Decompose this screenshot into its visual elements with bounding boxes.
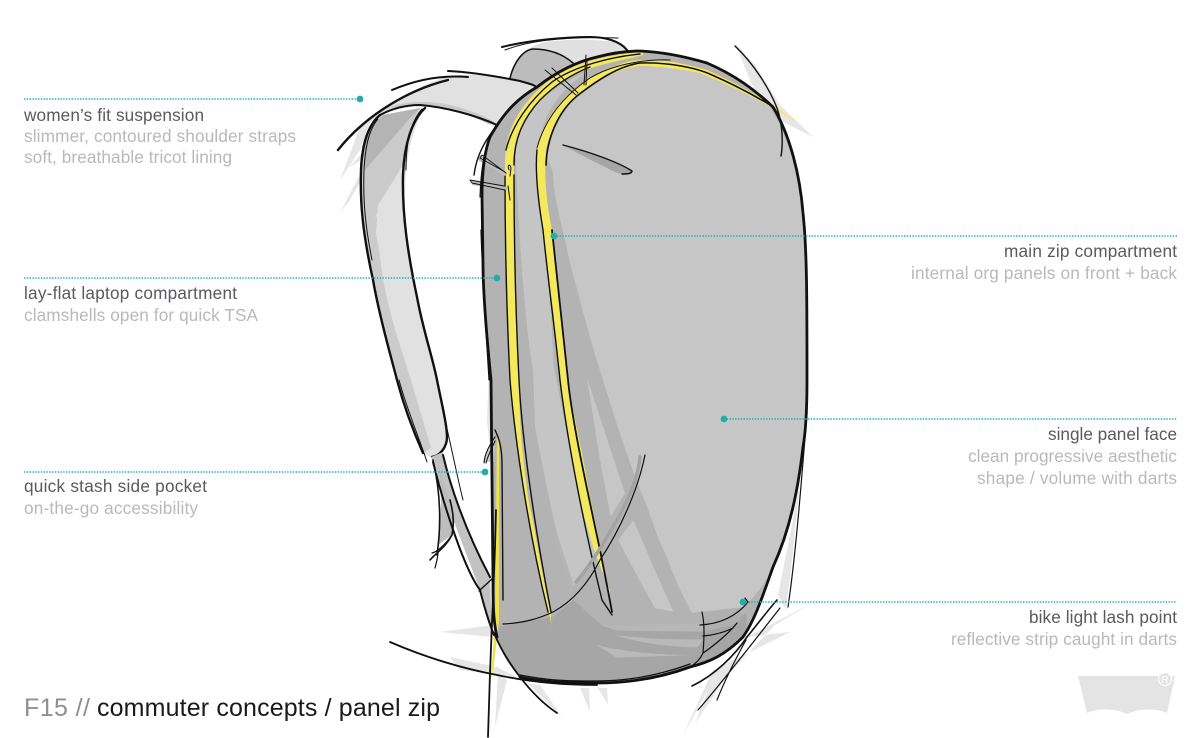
bottom dark zone bbox=[498, 600, 746, 680]
callout: main zip compartment bbox=[551, 233, 1177, 283]
callout: main zip compartment: internal org panels on front + back bbox=[911, 263, 1177, 283]
callout: single panel face bbox=[721, 416, 1177, 488]
callout: single panel face: shape / volume with darts bbox=[977, 468, 1177, 488]
callout: women's fit suspension bbox=[23, 96, 363, 167]
callout: lay-flat laptop compartment: clamshells open for quick TSA bbox=[24, 305, 259, 325]
zipper 1 bbox=[505, 52, 643, 630]
light stripe below seam bbox=[618, 520, 673, 612]
strap underside wash bbox=[385, 102, 497, 124]
zipper pulls bbox=[470, 55, 587, 200]
callout: lay-flat laptop compartment: lay-flat laptop compartment bbox=[24, 283, 237, 303]
callout: lay-flat laptop compartment bbox=[24, 275, 500, 325]
logo bbox=[1078, 672, 1175, 714]
title: commuter concepts / panel zip bbox=[97, 694, 440, 722]
bag body bbox=[390, 46, 807, 737]
callout: quick stash side pocket: quick stash side pocket bbox=[24, 476, 207, 496]
callout: bike light lash point bbox=[740, 599, 1177, 649]
zipper 2 bbox=[536, 60, 800, 615]
main face panel bbox=[547, 66, 807, 613]
callout: main zip compartment: main zip compartment bbox=[1004, 241, 1177, 261]
callout: single panel face: single panel face bbox=[1048, 424, 1177, 444]
stripe between zips bbox=[533, 360, 597, 588]
shoulder strap bbox=[338, 71, 536, 500]
strap light streak bbox=[375, 170, 403, 220]
callout: quick stash side pocket bbox=[24, 469, 488, 518]
callout: women's fit suspension: women’s fit suspension bbox=[23, 105, 204, 125]
strap medium shading bbox=[361, 108, 431, 453]
lower shading detail bbox=[498, 368, 746, 680]
title: F15 // bbox=[24, 694, 90, 722]
top grab handle bbox=[502, 37, 640, 86]
logo: R bbox=[1161, 675, 1169, 686]
lower strap webbing bbox=[430, 452, 494, 635]
light wedge inside dark band bbox=[587, 377, 625, 517]
callout: quick stash side pocket: on-the-go accessibility bbox=[24, 498, 198, 518]
sketch shadow strokes bbox=[340, 43, 813, 737]
right-side seams and bottom curves bbox=[483, 430, 748, 667]
callout: women's fit suspension: soft, breathable tricot lining bbox=[24, 147, 232, 167]
callout: bike light lash point: reflective strip caught in darts bbox=[951, 629, 1177, 649]
loose sketch lines bbox=[390, 413, 807, 737]
yellow edge zip on left side bbox=[491, 430, 499, 680]
strap dark fold bbox=[362, 108, 420, 170]
callout: bike light lash point: bike light lash point bbox=[1029, 607, 1177, 627]
panel between zips bbox=[515, 70, 590, 370]
bag outline bbox=[480, 46, 807, 683]
callout: single panel face: clean progressive aesthetic bbox=[968, 446, 1177, 466]
callout: women's fit suspension: slimmer, contoured shoulder straps bbox=[24, 126, 296, 146]
front dart bbox=[563, 145, 632, 174]
